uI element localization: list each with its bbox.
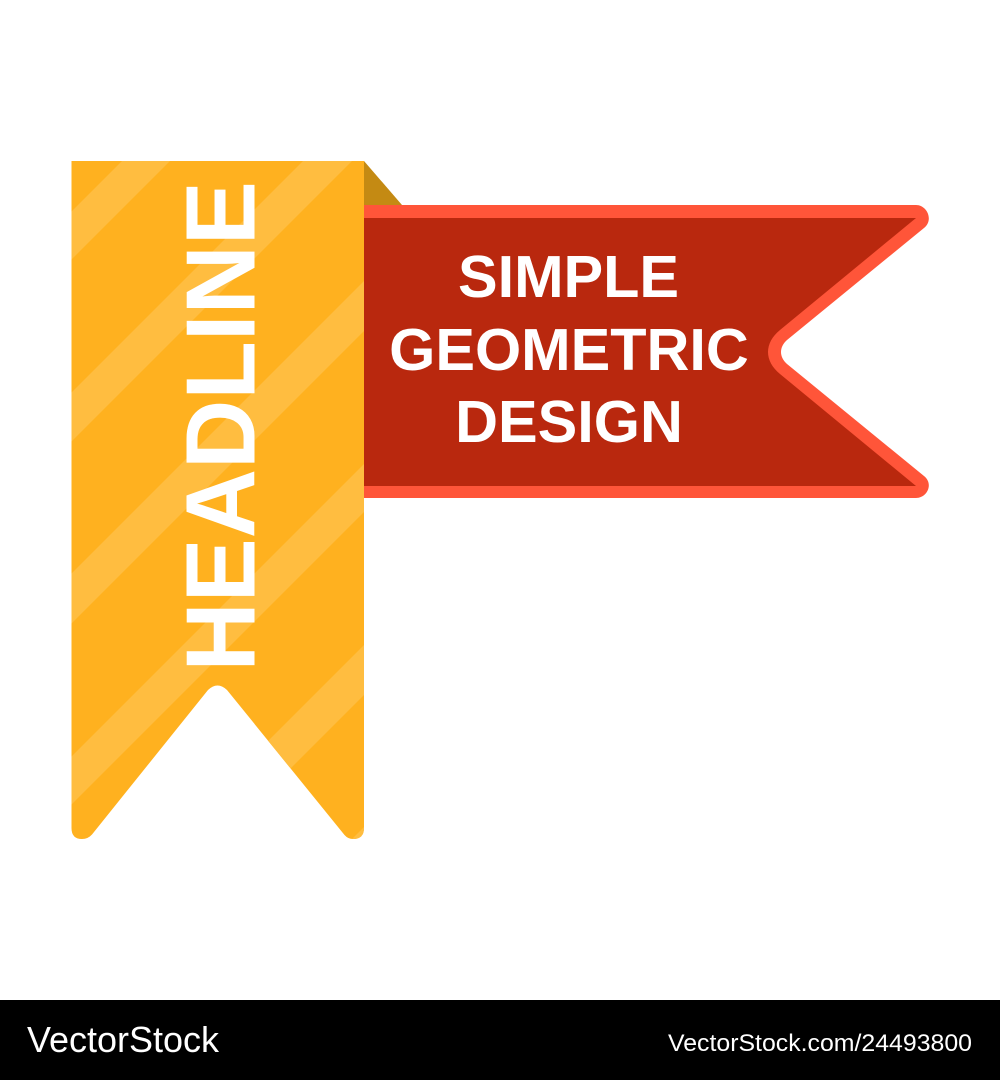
vertical headline: HEADLINE xyxy=(166,181,276,672)
banner border xyxy=(364,205,929,498)
line: geometric: GEOMETRIC xyxy=(389,316,749,383)
diagonal stripes xyxy=(71,161,364,839)
banner text xyxy=(389,243,749,455)
line: design: DESIGN xyxy=(455,388,683,455)
fold shadow triangle xyxy=(364,161,402,205)
red ribbon banner xyxy=(364,205,929,498)
yellow bookmark ribbon xyxy=(71,161,364,839)
ribbon body xyxy=(72,161,364,839)
line: simple: SIMPLE xyxy=(458,243,679,310)
footer url: VectorStock.com/24493800 xyxy=(668,1030,972,1057)
footer logo text: VectorStock xyxy=(27,1019,220,1060)
footer background xyxy=(0,1000,1000,1080)
footer bar xyxy=(0,1000,1000,1080)
banner fill xyxy=(364,218,916,486)
